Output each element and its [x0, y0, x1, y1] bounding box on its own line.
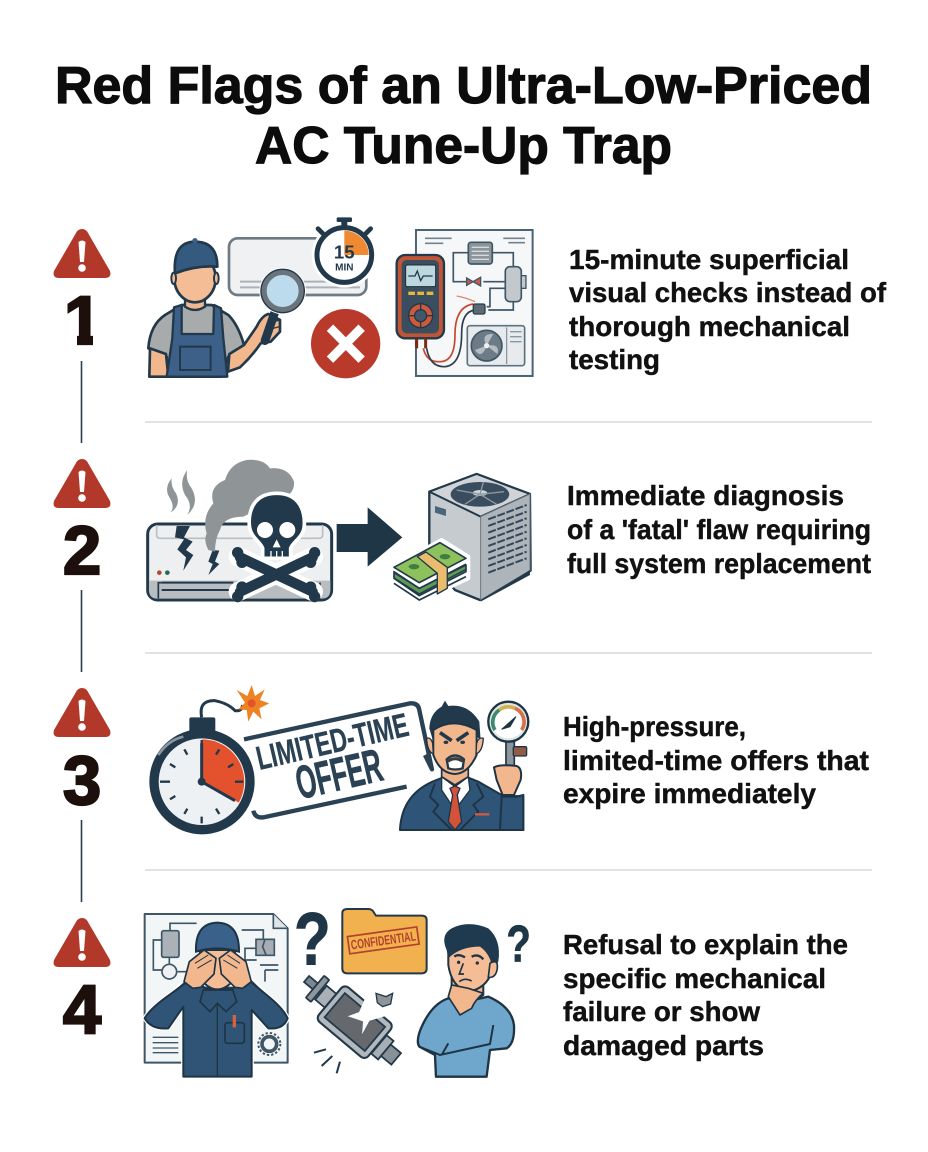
- panel: flag 3: [54, 685, 869, 830]
- icon: bomb timer: [154, 685, 269, 830]
- illustration: limited-time pressure: [154, 685, 528, 830]
- icon: 15 minute stopwatch: 15: [334, 242, 355, 263]
- text: flag 4 description: damaged parts: [563, 1030, 764, 1061]
- badge: warning triangle and number 1: [54, 229, 110, 346]
- icon: technician with magnifier: [148, 238, 306, 377]
- text: flag 4 description: failure or show: [563, 996, 761, 1027]
- text: flag 1 description: testing: [569, 344, 660, 375]
- icon: limited-time offer stamp: OFFER: [291, 739, 387, 809]
- icon: confidential folder: CONFIDENTIAL: [350, 929, 417, 952]
- title: [55, 57, 872, 175]
- icon: broken AC unit: [148, 524, 332, 600]
- text: flag 1 description: 15-minute superficial: [569, 244, 849, 275]
- badge: warning triangle and number 1: 1: [64, 282, 102, 359]
- illustration: fatal flaw leading to costly replacement: [148, 460, 531, 602]
- text: flag 3 description: [563, 711, 869, 809]
- text: flag 2 description: full system replacement: [567, 548, 871, 579]
- title: AC Tune-Up Trap: [255, 117, 672, 175]
- badge: warning triangle and number 3: [54, 688, 110, 819]
- text: flag 3 description: High-pressure,: [563, 711, 746, 742]
- icon: small question mark: ?: [506, 915, 531, 973]
- panel: flag 4: [54, 898, 848, 1077]
- icon: stack of cash: [392, 540, 468, 602]
- badge: warning triangle and number 2: 2: [63, 512, 101, 589]
- badge: warning triangle and number 4: 4: [63, 971, 101, 1048]
- icon: skull and crossbones: [232, 493, 320, 602]
- icon: smoke: [167, 460, 294, 552]
- icon: confused customer: [418, 924, 514, 1077]
- icon: broken part: [291, 961, 414, 1075]
- icon: 15 minute stopwatch: [312, 217, 377, 288]
- badge: warning triangle and number 2: [54, 459, 110, 589]
- text: flag 4 description: [563, 929, 848, 1061]
- illustration: refusal to explain: [145, 898, 531, 1077]
- illustration: superficial check versus mechanical testing: [148, 217, 533, 378]
- arrow: [337, 507, 402, 567]
- panel: flag 1: [54, 217, 887, 378]
- text: flag 4 description: Refusal to explain the: [563, 929, 848, 960]
- title: Red Flags of an Ultra-Low-Priced: [55, 57, 872, 115]
- text: flag 2 description: of a 'fatal' flaw requiring: [567, 514, 871, 545]
- text: flag 2 description: Immediate diagnosis: [567, 480, 844, 511]
- icon: confidential folder: [342, 909, 427, 973]
- badge: warning triangle and number 3: 3: [63, 742, 101, 819]
- icon: schematic page: [145, 914, 288, 1063]
- text: flag 3 description: limited-time offers that: [563, 745, 869, 776]
- icon: schematic sheet: [397, 230, 533, 376]
- text: flag 1 description: visual checks instead of: [569, 277, 887, 308]
- icon: angry salesman with gauge: [400, 701, 528, 830]
- badge: warning triangle and number 4: [54, 918, 110, 1048]
- icon: 15 minute stopwatch: MIN: [335, 263, 353, 274]
- panel: flag 2: [54, 459, 871, 602]
- text: flag 1 description: thorough mechanical: [569, 311, 850, 342]
- icon: new condenser unit: [429, 474, 531, 602]
- icon: large question mark: ?: [294, 898, 331, 981]
- icon: limited-time offer stamp: [244, 703, 432, 817]
- icon: limited-time offer stamp: LIMITED-TIME: [253, 707, 412, 778]
- icon: technician covering eyes: [145, 923, 288, 1077]
- text: flag 3 description: expire immediately: [563, 778, 817, 809]
- icon: wall AC unit: [229, 238, 366, 295]
- text: flag 4 description: specific mechanical: [563, 963, 826, 994]
- icon: red X: [311, 309, 380, 378]
- text: flag 2 description: [567, 480, 871, 579]
- text: flag 1 description: [569, 244, 887, 375]
